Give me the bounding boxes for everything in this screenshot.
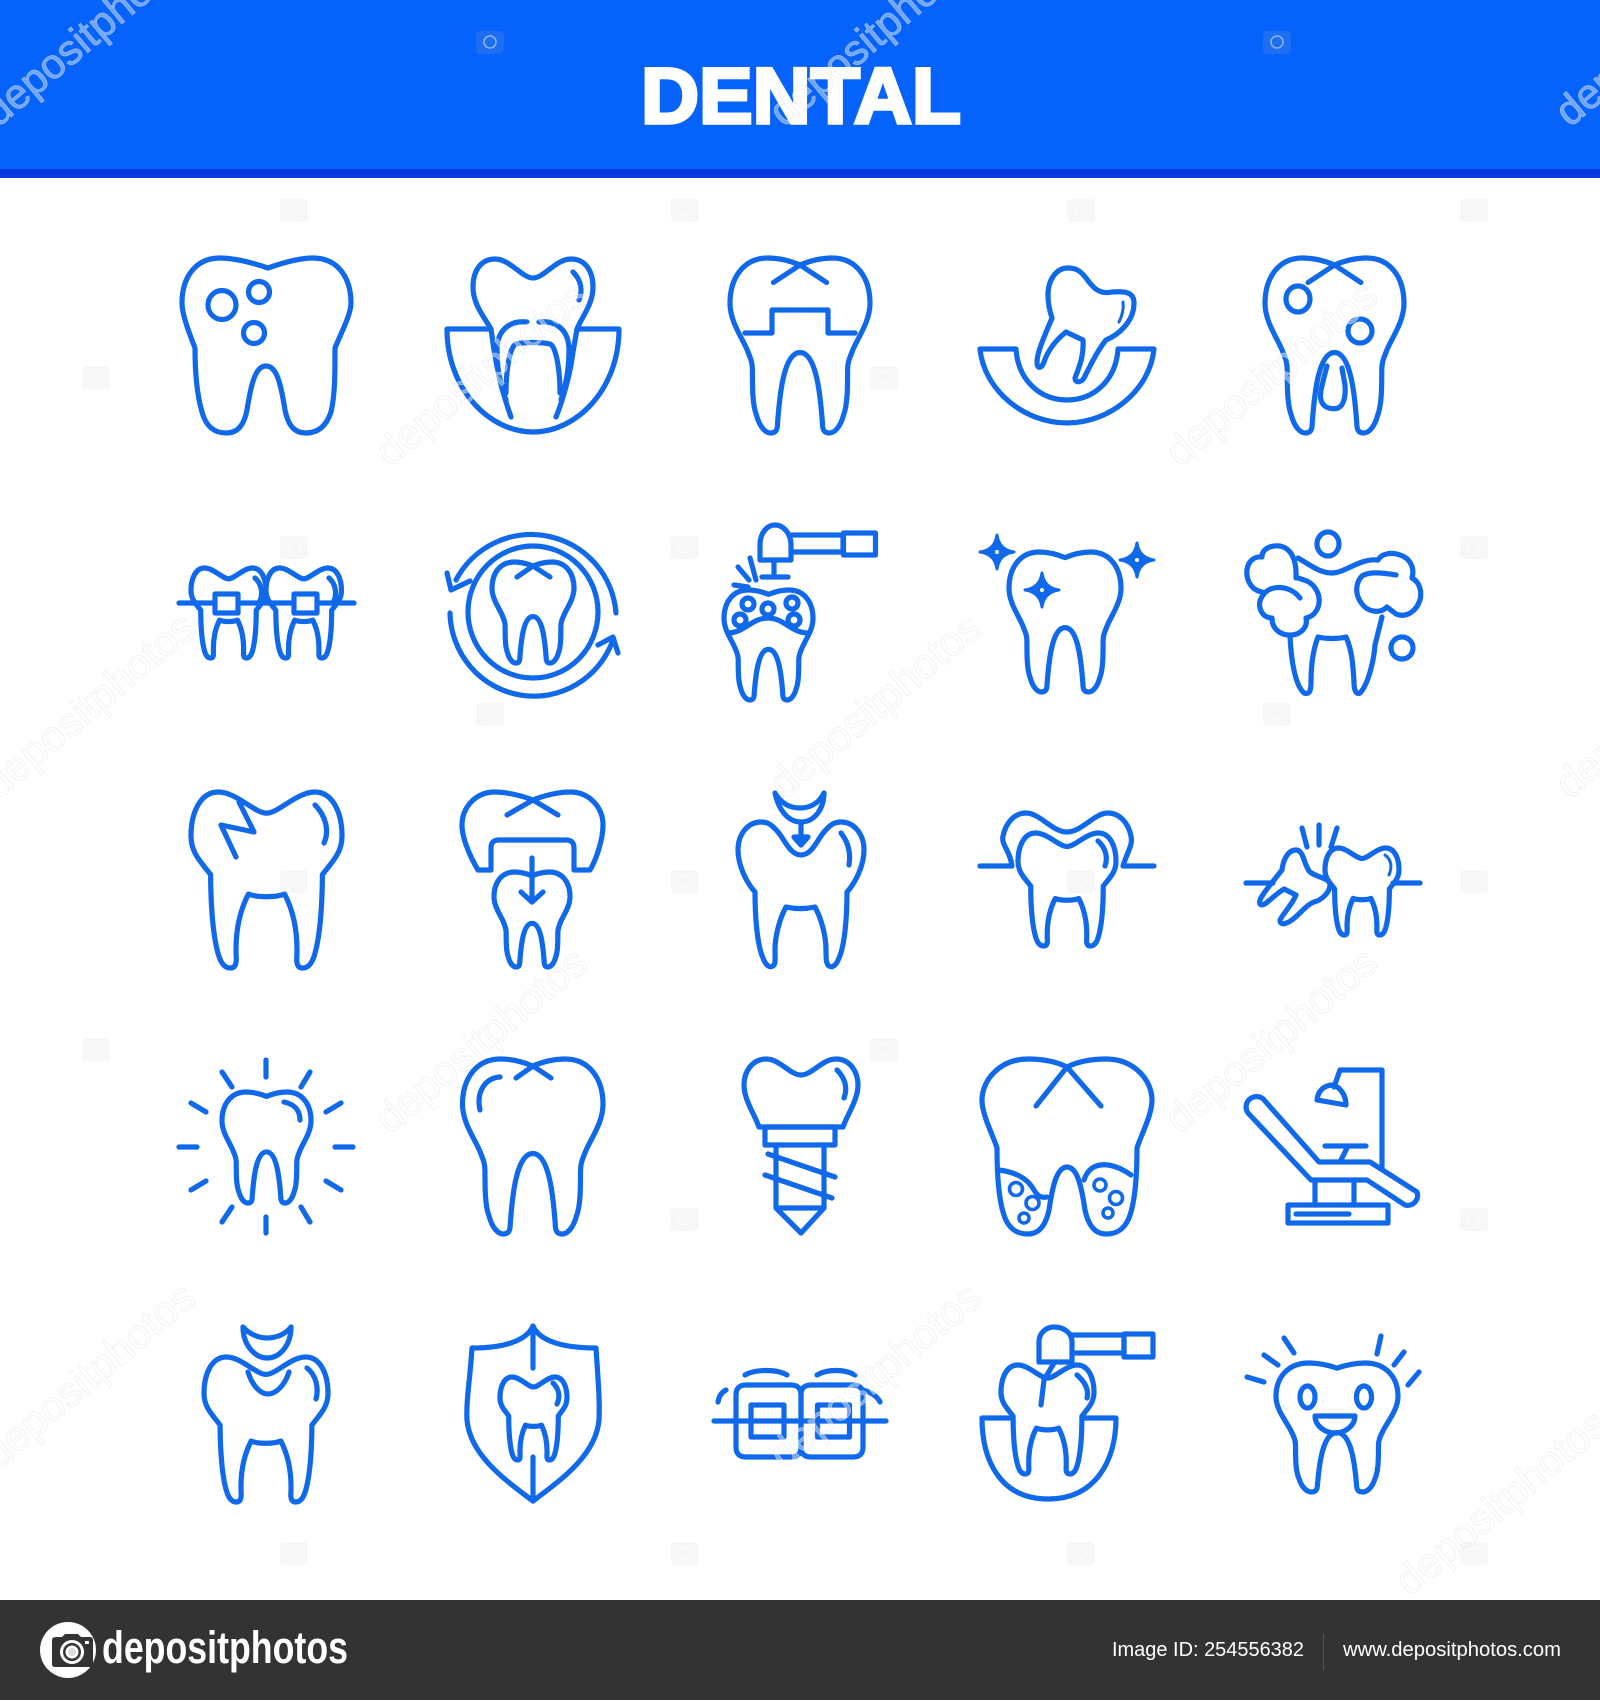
watermark overlay: depositphotos [760,1273,990,1477]
icon: tooth extraction from gum [980,268,1154,423]
icon: drill on decayed tooth [724,525,876,700]
icon: tooth with foam bubbles [1247,532,1421,693]
footer image id: Image ID: 254556382 [1112,1639,1304,1661]
watermark overlay: depositphotos [760,603,990,807]
icon: tooth with inlay crown [730,258,870,433]
icon: drill on tooth in gum [982,1327,1153,1499]
icon: tooth with infected roots [982,1059,1152,1234]
icon: tooth with cavities [182,258,351,433]
icon: tooth in rotating circle [447,535,618,696]
icon: impacted wisdom tooth [1246,825,1420,935]
footer website: www.depositphotos.com [1342,1639,1561,1661]
icon: healthy molar [462,1059,603,1234]
icon: shining tooth with rays [179,1060,353,1233]
icon: footer camera logo [40,1622,96,1678]
icon: filling dropping into tooth [738,793,864,967]
icon: dental implant [744,1059,858,1233]
icon: crown placed on tooth [462,792,603,967]
icon grid [179,258,1421,1502]
footer brand name: depositphotos [102,1622,348,1673]
icon: swollen gum around tooth [980,813,1154,946]
icon: tooth with decay spots [1265,258,1404,433]
icon: braces on two teeth [179,568,354,658]
watermark overlay: depositphotos [1156,938,1386,1142]
watermark overlay: depositphotos [366,271,596,475]
icon: happy tooth face [1247,1336,1419,1492]
icon: filling removed from tooth [204,1327,328,1502]
icon: sparkling clean tooth [980,535,1154,692]
icon: cracked tooth [191,792,342,968]
watermark camera marks [82,31,1488,1565]
icon: braces brackets [714,1370,886,1457]
footer bar [0,1600,1600,1700]
title: DENTAL [641,51,961,140]
header banner [0,0,1600,178]
icon: dental chair [1246,1070,1418,1223]
icon: tooth root in gum [447,259,619,432]
icon: shield protecting tooth [467,1326,599,1501]
watermark overlay: depositphotos [366,938,596,1142]
watermark overlay: depositphotos [1156,271,1386,475]
